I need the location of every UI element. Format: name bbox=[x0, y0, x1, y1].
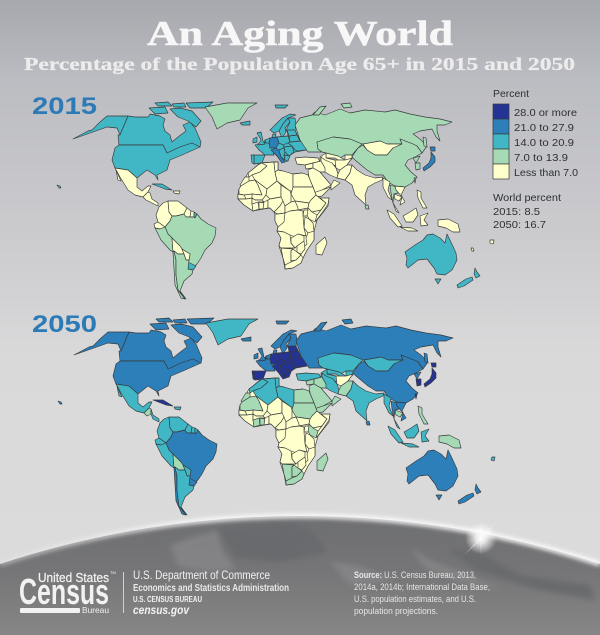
subtitle: Percentage of the Population Age 65+ in 2015 and 2050 bbox=[24, 54, 575, 74]
Europe 2050 bbox=[252, 321, 309, 380]
earth dark sea patches bbox=[218, 522, 595, 600]
world percent note bbox=[493, 192, 561, 231]
earth rim glow bbox=[0, 516, 600, 564]
legend labels: 14.0 to 20.9 bbox=[514, 137, 574, 149]
Africa 2050 bbox=[239, 378, 330, 485]
Department of Commerce text: census.gov bbox=[133, 603, 190, 617]
trademark: TM bbox=[110, 570, 116, 575]
legend labels: 7.0 to 13.9 bbox=[514, 152, 568, 164]
Department of Commerce text: Economics and Statistics Administration bbox=[133, 583, 289, 594]
Russia and Central Asia 2050 bbox=[296, 319, 453, 403]
legend labels: 28.0 or more bbox=[514, 107, 577, 119]
Census Bureau logo bbox=[19, 570, 116, 615]
earth disc bbox=[0, 516, 600, 635]
world percent note: 2015: 8.5 bbox=[493, 206, 540, 218]
Asia 2015 bbox=[295, 147, 460, 232]
source note bbox=[354, 570, 490, 616]
Africa 2015 bbox=[238, 162, 329, 269]
earth land patches bbox=[170, 530, 505, 590]
Europe 2015 bbox=[251, 105, 308, 164]
legend title: Percent bbox=[493, 88, 529, 100]
world map 2050 bbox=[58, 318, 495, 515]
Bureau wordmark: Bureau bbox=[82, 605, 109, 615]
source note: 2014a, 2014b; International Data Base, bbox=[354, 582, 490, 592]
South America 2050 bbox=[155, 417, 217, 515]
United States wordmark: United States bbox=[38, 570, 109, 585]
legend labels: Less than 7.0 bbox=[514, 167, 578, 179]
legend bbox=[493, 88, 578, 231]
legend swatches bbox=[493, 104, 509, 179]
Department of Commerce text: U.S. Department of Commerce bbox=[133, 568, 270, 582]
title: An Aging World bbox=[147, 14, 454, 53]
South America 2015 bbox=[154, 201, 216, 299]
source note: U.S. population estimates, and U.S. bbox=[354, 594, 476, 604]
source note: population projections. bbox=[354, 606, 438, 616]
Census wordmark: Census bbox=[19, 571, 109, 612]
source note: Source: U.S. Census Bureau, 2013, bbox=[354, 570, 476, 580]
world map 2015 bbox=[57, 102, 494, 299]
North America 2050 bbox=[58, 318, 258, 422]
earth horizon bbox=[0, 516, 600, 635]
Oceania 2050 bbox=[406, 450, 495, 504]
world percent note: World percent bbox=[493, 192, 561, 204]
logo divider bbox=[123, 572, 124, 613]
Department of Commerce text bbox=[133, 568, 289, 617]
Department of Commerce text: U.S. CENSUS BUREAU bbox=[133, 595, 202, 604]
world percent note: 2050: 16.7 bbox=[493, 219, 546, 231]
Oceania 2015 bbox=[405, 234, 494, 288]
legend labels: 21.0 to 27.9 bbox=[514, 122, 574, 134]
sun flare bbox=[464, 520, 498, 556]
heading: 2015: 2015 bbox=[32, 93, 97, 120]
Russia and Central Asia 2015 bbox=[295, 103, 452, 187]
North America 2015 bbox=[57, 102, 257, 206]
Asia 2050 bbox=[296, 363, 461, 448]
logo bar bbox=[20, 608, 80, 613]
heading: 2050: 2050 bbox=[32, 311, 97, 338]
legend labels bbox=[514, 107, 578, 179]
